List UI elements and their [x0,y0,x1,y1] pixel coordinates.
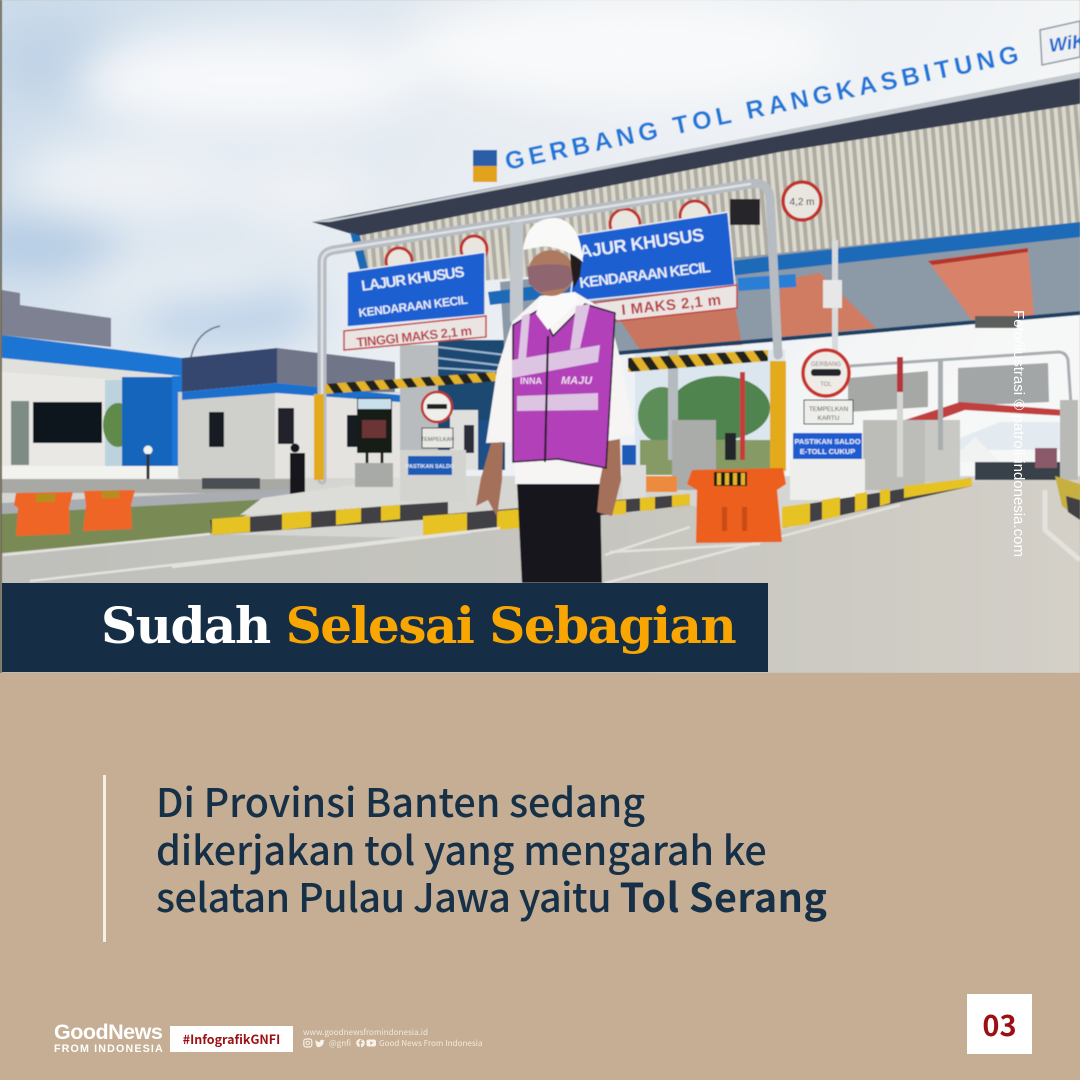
man in hard hat and purple vest: INNA [520,376,542,386]
right side booths and far gantry [622,352,1078,500]
social handle: @gnfi [329,1038,351,1049]
blue lane sign right: AJUR KHUSUS [578,225,705,262]
road signs on left lane: PASTIKAN SALDO [406,464,455,470]
orange barrier centre [687,468,786,543]
social icons [303,1038,376,1048]
vest [513,304,615,468]
website url: www.goodnewsfromindonesia.id [303,1027,428,1038]
road surface [0,478,1080,673]
photo: toll gate Rangkasbitung with man in vest [0,0,1080,673]
gerbang tol signs: KARTU [818,415,840,422]
sky with clouds [0,0,1080,560]
footer logo [54,1020,164,1055]
blue lane sign left: TINGGI MAKS 2,1 m [356,323,473,350]
small figure walking [290,444,305,494]
logo wordmark: GoodNews [54,1020,162,1044]
body text: Di Provinsi Banten sedang [156,772,645,829]
gerbang tol signs [790,240,865,500]
height signs [386,182,821,274]
left building [2,290,240,481]
hard hat [523,218,583,262]
blue lane sign right: I MAKS 2,1 m [621,292,722,319]
collar [536,292,578,330]
vertical accent line [103,775,106,942]
hazard striped beams [325,350,768,394]
ground base [0,476,1080,566]
gerbang tol signs: GERBANG [811,362,841,368]
title band [2,583,768,672]
blue lane sign left: KENDARAAN KECIL [358,293,469,320]
main gantry frame [314,184,786,480]
face and mask [528,250,574,296]
shirt and sleeves [486,292,634,484]
photo credit: Foto/ilustrasi © patroli-indonesia.com [1010,310,1027,557]
body text: dikerjakan tol yang mengarah ke [156,820,767,876]
roof sign: Gerbang Tol Rangkasbitung: GERBANG TOL RANGKASBITUNG [502,40,1021,176]
title text: Sudah Selesai Sebagian [101,596,735,655]
blue lane sign left [344,252,486,350]
centre pillar and blue structure [400,340,505,480]
page number box: 03 [982,1003,1017,1045]
hashtag box: #InfografikGNFI [183,1029,280,1048]
body text: selatan Pulau Jawa yaitu Tol Serang [156,867,827,924]
left edge strip [0,0,2,673]
trousers [517,482,602,583]
gerbang tol signs: TEMPELKAN [809,406,848,413]
hands [476,439,621,517]
social page name: Good News From Indonesia [379,1038,482,1049]
blue lane sign right [570,212,737,321]
trees behind gate [635,350,785,475]
social row [303,1038,482,1049]
orange road barriers left [14,490,135,536]
gerbang tol signs: PASTIKAN SALDO [794,437,861,446]
logo tagline: FROM INDONESIA [54,1043,164,1055]
road signs on left lane [240,392,466,515]
curbs yellow and black [210,476,1080,536]
middle building [178,348,403,478]
hashtag box [170,1026,293,1052]
toll gate canopy [312,72,1080,365]
blue lane sign left: LAJUR KHUSUS [360,264,466,295]
road signs on left lane: TEMPELKAN [421,437,454,443]
man in hard hat and purple vest [476,218,634,583]
lane markings [3,490,1080,583]
gerbang tol signs: E-TOLL CUKUP [800,447,855,456]
guardrail and left ground [2,478,292,553]
gerbang tol signs: TOL [820,382,832,388]
man in hard hat and purple vest: MAJU [561,375,593,387]
blue lane sign right: KENDARAAN KECIL [578,259,712,292]
height signs: 4,2 m [789,197,815,208]
page number box [967,994,1032,1054]
body text [156,772,827,924]
